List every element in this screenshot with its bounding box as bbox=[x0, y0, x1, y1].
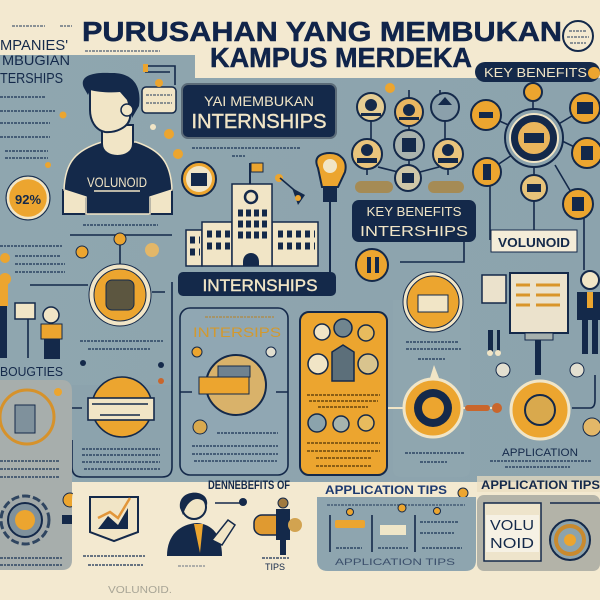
panel: application tips bbox=[317, 497, 476, 571]
text: application: APPLICATION bbox=[502, 447, 578, 459]
icon: hanging tag bbox=[280, 178, 305, 205]
banner: internships bbox=[178, 272, 336, 296]
top-right pill: key benefits: KEY BENEFITS bbox=[484, 66, 587, 80]
panel: industries bbox=[65, 282, 172, 477]
left panel bbox=[0, 380, 72, 570]
top small text bbox=[12, 26, 160, 51]
panel: application tips: APPLICATION TIPS bbox=[335, 557, 455, 567]
note card bbox=[142, 79, 176, 113]
right apply circle bbox=[496, 363, 600, 439]
small dots bbox=[150, 124, 283, 182]
text: tips bbox=[262, 558, 290, 572]
badge: key benefits internships: INTERSHIPS bbox=[360, 223, 468, 240]
92% badge: 92% bbox=[15, 192, 41, 207]
heading: benefits: DENNEBEFITS OF bbox=[208, 480, 290, 492]
heading: industries: BOUGTIES bbox=[0, 365, 63, 379]
connector to note bbox=[143, 64, 175, 85]
text: chart caption bbox=[83, 556, 146, 565]
label: Volunoid: VOLUNOID bbox=[498, 235, 570, 250]
main blue-grey panel bbox=[0, 55, 600, 482]
seal: top right bbox=[563, 21, 593, 51]
text: tips: TIPS bbox=[265, 562, 285, 572]
icon: mask circle bbox=[356, 249, 388, 281]
footer watermark: VOLUNOID. bbox=[108, 585, 172, 596]
people with monitor bbox=[482, 271, 600, 375]
badge: Yai membukan internships: YAI MEMBUKAN bbox=[204, 93, 314, 109]
panel: Volunoid bbox=[477, 495, 600, 571]
gear bbox=[0, 493, 78, 565]
badge: key benefits internships bbox=[352, 200, 476, 242]
title: KAMPUS MERDEKA bbox=[210, 42, 472, 73]
heading: application tips: APPLICATION TIPS bbox=[325, 483, 447, 497]
connector lines bbox=[400, 242, 464, 262]
person with Volunoid shirt: VOLUNOID bbox=[87, 174, 147, 190]
left text block bbox=[0, 97, 66, 168]
left heading bbox=[0, 37, 70, 87]
badge: Yai membukan internships bbox=[182, 84, 336, 138]
icon: document circle bbox=[182, 162, 216, 196]
bottom cream panel bbox=[72, 482, 320, 600]
person in suit bbox=[167, 493, 247, 556]
people with board bbox=[0, 273, 62, 359]
panel: Volunoid: VOLU bbox=[490, 517, 534, 534]
central orange circle bbox=[30, 233, 172, 326]
network: people circles bbox=[352, 83, 464, 193]
panel: internships bbox=[180, 308, 288, 475]
caption and small icons bbox=[0, 225, 159, 272]
left heading: MBUGIAN bbox=[2, 52, 70, 68]
person with Volunoid shirt bbox=[63, 73, 172, 214]
badge: Yai membukan internships: INTERNSHIPS bbox=[192, 111, 326, 133]
panel: orange card bbox=[300, 312, 387, 475]
lightbulb bbox=[316, 153, 346, 272]
heading: application tips right: APPLICATION TIPS bbox=[481, 478, 600, 492]
icon: chart shield bbox=[90, 497, 138, 541]
benefit hub network bbox=[471, 83, 600, 270]
panel: internships: INTERSIPS bbox=[193, 324, 281, 340]
92% badge bbox=[6, 176, 50, 220]
panel: apply middle bbox=[388, 272, 502, 477]
text: application bbox=[490, 447, 592, 467]
badge: key benefits internships: KEY BENEFITS bbox=[366, 205, 462, 219]
caption under badge bbox=[192, 148, 300, 156]
text: caption mark bbox=[178, 565, 205, 567]
building bbox=[186, 163, 318, 266]
icons: key and figure bbox=[254, 498, 302, 555]
banner: internships: INTERNSHIPS bbox=[202, 276, 318, 295]
top-right pill: key benefits bbox=[475, 62, 600, 82]
left heading: MPANIES' bbox=[0, 37, 68, 54]
title bbox=[82, 16, 562, 73]
title: PURUSAHAN YANG MEMBUKAN bbox=[82, 16, 562, 47]
label: Volunoid bbox=[491, 230, 577, 252]
left heading: TERSHIPS bbox=[0, 70, 63, 87]
panel: Volunoid: NOID bbox=[490, 535, 534, 552]
